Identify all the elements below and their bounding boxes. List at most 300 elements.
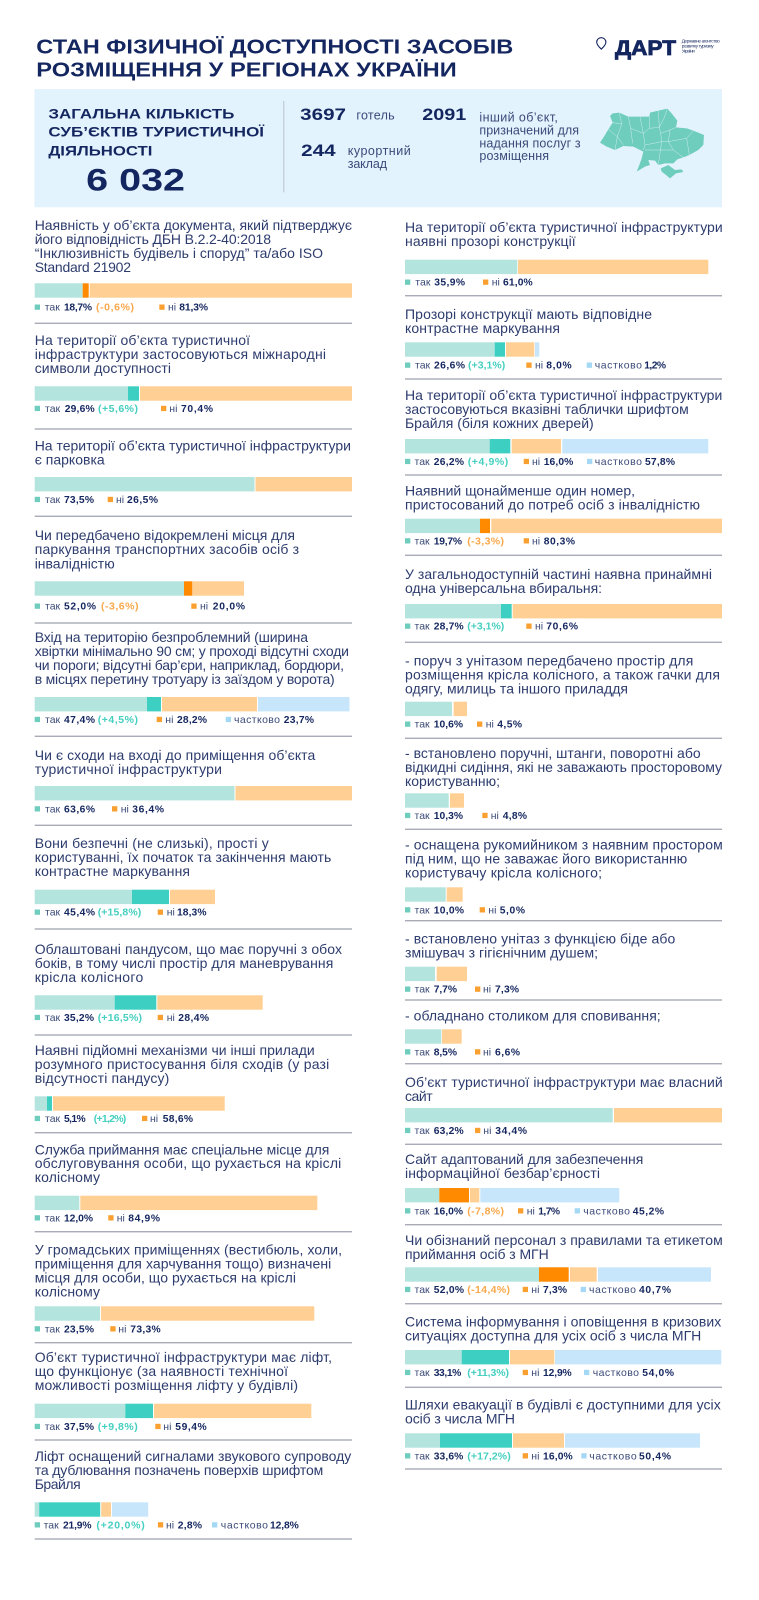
stacked bar	[35, 1196, 317, 1210]
legend: ні	[531, 1450, 539, 1462]
legend	[35, 1519, 299, 1531]
legend: так	[414, 535, 430, 547]
stacked bar	[405, 887, 463, 902]
heading: total count: ДІЯЛЬНОСТІ	[48, 142, 152, 158]
stacked bar	[35, 1096, 225, 1111]
stacked bar	[405, 1350, 721, 1364]
question text	[35, 1142, 341, 1185]
legend: 57,8%	[645, 457, 675, 468]
panel: reserved parking	[35, 527, 352, 624]
legend: (+1,2%)	[94, 1113, 126, 1125]
question text	[35, 1042, 329, 1086]
stacked bar	[35, 1502, 148, 1517]
panel: changing table	[405, 1008, 722, 1064]
question text: контрастне маркування	[35, 863, 190, 879]
question text: туристичної інфраструктури	[35, 761, 222, 777]
legend	[35, 1113, 193, 1125]
question text: хвіртки мінімально 90 см; у проході відсутні сходи	[35, 643, 349, 659]
legend: так	[45, 1113, 61, 1125]
question text: - обладнано столиком для сповивання;	[405, 1008, 661, 1024]
legend: 7,3%	[543, 1285, 567, 1296]
legend: 61,0%	[503, 278, 533, 289]
question text: боків, в тому числі простір для маневрування	[35, 955, 333, 971]
legend: частково	[595, 360, 642, 372]
question text: Наявні підйомні механізми чи інші прилади	[35, 1042, 315, 1058]
question text: користуванню;	[405, 773, 500, 789]
question text: місця для особи, що рухається на кріслі	[35, 1270, 296, 1286]
legend: 73,5%	[64, 495, 94, 506]
legend: 52,0%	[64, 602, 96, 613]
panel: adapted website	[405, 1151, 722, 1225]
stat: hotels: 3697	[300, 105, 346, 124]
question text	[405, 930, 676, 960]
question text: можливості розміщення ліфту у будівлі)	[35, 1377, 298, 1393]
stat: other: розміщення	[479, 149, 549, 163]
legend: 12,9%	[543, 1368, 572, 1379]
legend: так	[414, 1125, 430, 1137]
panel: washbasin	[405, 836, 723, 921]
stat: resorts: заклад	[348, 157, 388, 171]
legend: так	[45, 403, 61, 415]
legend: ні	[531, 1284, 539, 1296]
legend: (+3,1%)	[468, 360, 505, 372]
stacked bar	[405, 604, 722, 618]
legend: так	[45, 302, 60, 314]
legend: 6,6%	[495, 1047, 520, 1058]
question text: осіб з числа МГН	[405, 1410, 515, 1426]
question text	[35, 527, 299, 572]
question text: - поруч з унітазом передбачено простір для	[405, 652, 693, 668]
legend: (-7,8%)	[467, 1205, 504, 1217]
stat: hotels	[300, 105, 395, 124]
legend: так	[414, 1284, 430, 1296]
legend: 73,3%	[130, 1324, 161, 1335]
legend: (+15,8%)	[98, 907, 141, 919]
question text: Облаштовані пандусом, що має поручні з обох	[35, 941, 342, 957]
legend	[35, 907, 207, 919]
legend: ні	[150, 1113, 158, 1125]
legend	[35, 1323, 161, 1335]
stacked bar	[405, 519, 722, 533]
question text	[405, 1074, 723, 1104]
legend: 33,6%	[434, 1451, 463, 1462]
question text	[35, 747, 316, 777]
stat: resorts	[301, 141, 411, 171]
question text: змішувач з гігієнічним душем;	[405, 944, 598, 960]
question text	[35, 941, 342, 985]
question text: крісла колісного	[35, 969, 144, 985]
legend: 54,0%	[642, 1368, 674, 1379]
legend	[35, 601, 245, 613]
panel: reception desk	[35, 1142, 352, 1232]
panel: document compliance	[35, 217, 352, 324]
panel: contrast marking	[405, 306, 722, 380]
legend: частково	[589, 1284, 636, 1296]
legend: так	[415, 277, 431, 289]
stacked bar	[35, 697, 349, 711]
question text	[35, 217, 352, 275]
question text: під ним, що не заважає його використанню	[405, 850, 687, 866]
legend: 45,2%	[633, 1206, 664, 1217]
stacked bar	[35, 786, 352, 800]
panel: accessibility symbols	[35, 332, 352, 430]
legend: так	[414, 904, 430, 916]
legend	[35, 1012, 209, 1024]
icon: map of Ukraine	[600, 109, 704, 178]
legend: 52,0%	[434, 1285, 464, 1296]
legend: (+9,8%)	[98, 1421, 138, 1433]
legend: ні	[166, 1519, 174, 1531]
panel: crisis notification	[405, 1314, 722, 1388]
question text	[405, 1151, 643, 1181]
legend: 7,7%	[434, 985, 457, 996]
question text	[405, 1314, 721, 1344]
panel: wheelchair space near toilet	[405, 652, 722, 739]
logo: ДАРТ: України	[682, 48, 695, 54]
legend: так	[45, 1212, 60, 1224]
question text: обслуговування особи, що рухається на кріслі	[35, 1155, 341, 1171]
legend: 1,7%	[538, 1206, 560, 1217]
legend: 47,4%	[64, 715, 95, 726]
legend: так	[45, 1323, 60, 1335]
question text: Сайт адаптований для забезпечення	[405, 1151, 643, 1167]
stacked bar	[35, 995, 263, 1010]
question text: На території об’єкта туристичної інфраструктури	[35, 438, 351, 454]
panel: evacuation routes	[405, 1396, 722, 1470]
legend	[405, 904, 525, 916]
legend: 45,4%	[64, 908, 95, 919]
legend	[405, 1046, 520, 1058]
legend: 35,9%	[434, 278, 465, 289]
legend: (-0,6%)	[96, 302, 134, 314]
legend: 29,6%	[65, 404, 95, 415]
legend: 70,4%	[181, 404, 213, 415]
question text	[35, 1349, 332, 1393]
logo: ДАРТ	[597, 37, 720, 60]
legend: так	[414, 1367, 430, 1379]
question text	[405, 1232, 723, 1262]
legend: частково	[589, 1450, 637, 1462]
legend: 80,3%	[544, 536, 575, 547]
legend: 16,0%	[543, 1451, 573, 1462]
question text: У громадських приміщеннях (вестибюль, холи,	[35, 1242, 342, 1258]
legend: ні	[531, 1367, 539, 1379]
legend	[35, 1421, 207, 1433]
title: СТАН ФІЗИЧНОЇ ДОСТУПНОСТІ ЗАСОБІВ	[36, 35, 513, 58]
question text: Чи передбачено відокремлені місця для	[35, 527, 295, 543]
question text: На території об’єкта туристичної	[35, 332, 250, 348]
legend: ні	[492, 277, 500, 289]
question text: та дублювання позначень поверхів шрифтом	[35, 1462, 323, 1478]
legend: 35,2%	[64, 1013, 94, 1024]
legend: так	[414, 456, 430, 468]
legend: частково	[234, 714, 280, 726]
legend: 28,4%	[178, 1013, 209, 1024]
panel: safe stairs	[35, 835, 352, 930]
stacked bar	[35, 283, 352, 298]
stacked bar	[405, 1433, 700, 1448]
heading: total count	[48, 105, 265, 198]
legend: ні	[116, 494, 124, 506]
question text: - встановлено поручні, штанги, поворотні або	[405, 745, 701, 761]
legend: 7,3%	[495, 985, 519, 996]
legend: ні	[163, 1421, 171, 1433]
legend: частково	[595, 456, 642, 468]
stacked bar	[35, 1404, 311, 1418]
panel: own website	[405, 1074, 723, 1145]
legend: 10,6%	[434, 720, 463, 731]
stat: other	[422, 105, 581, 163]
panel: entrance to territory	[35, 629, 352, 737]
question text: пристосований до потреб осіб з інвалідністю	[405, 496, 700, 512]
legend: 50,4%	[639, 1451, 671, 1462]
question text: - оснащена рукомийником з наявним простором	[405, 836, 723, 852]
question text: Брайля	[35, 1476, 81, 1492]
legend: 18,7%	[64, 303, 92, 314]
question text: що функціонує (за наявності технічної	[35, 1363, 288, 1379]
legend	[405, 984, 519, 996]
legend: 19,7%	[434, 536, 462, 547]
legend	[35, 714, 314, 726]
legend: 70,6%	[546, 622, 578, 633]
legend: ні	[527, 1205, 535, 1217]
legend: 4,5%	[497, 720, 522, 731]
stat: other: 2091	[422, 105, 466, 124]
question text: одягу, милиць та іншого приладдя	[405, 680, 628, 696]
legend: 84,9%	[128, 1213, 160, 1224]
stacked bar	[405, 342, 539, 357]
panel: summary	[34, 89, 722, 207]
legend: так	[45, 907, 61, 919]
legend: (+5,6%)	[98, 403, 138, 415]
question text: відсутності пандусу)	[35, 1070, 169, 1086]
question text: інфраструктури застосовуються міжнародні	[35, 346, 326, 362]
legend: ні	[486, 719, 494, 731]
legend: так	[45, 803, 61, 815]
question text: в місцях перетину тротуару із заїздом у ворота)	[35, 671, 335, 687]
stacked bar	[405, 967, 467, 981]
legend: так	[414, 810, 430, 822]
legend: так	[414, 621, 430, 633]
stacked bar	[405, 1188, 619, 1202]
question text: Ліфт оснащений сигналами звукового супроводу	[35, 1448, 351, 1464]
legend	[405, 719, 522, 731]
question text: приміщення для харчування тощо) визначені	[35, 1256, 331, 1272]
legend: 26,6%	[434, 361, 465, 372]
logo: ДАРТ: ДАРТ	[615, 37, 676, 60]
stacked bar	[405, 1267, 711, 1282]
question text: Наявний щонайменше один номер,	[405, 482, 635, 498]
question text: Брайля (біля кожних дверей)	[405, 415, 594, 431]
question text: ситуаціях доступна для усіх осіб з числа МГН	[405, 1328, 701, 1344]
question text	[35, 1242, 342, 1300]
question text	[35, 629, 349, 687]
stacked bar	[405, 1029, 462, 1044]
legend: 58,6%	[163, 1114, 193, 1125]
panel: universal restroom	[405, 566, 722, 643]
question text: Система інформування і оповіщення в кризових	[405, 1314, 721, 1330]
legend: частково	[221, 1519, 268, 1531]
heading: total count: ЗАГАЛЬНА КІЛЬКІСТЬ	[48, 105, 234, 121]
legend: 36,4%	[132, 804, 164, 815]
legend	[405, 1205, 664, 1217]
question text: приймання осіб з МГН	[405, 1246, 549, 1262]
legend: ні	[117, 1212, 125, 1224]
legend: 37,5%	[64, 1422, 94, 1433]
question text: Вхід на територію безпроблемний (ширина	[35, 629, 308, 645]
question text: Служба приймання має спеціальне місце для	[35, 1142, 329, 1158]
question text	[405, 387, 722, 431]
legend	[405, 1125, 527, 1137]
legend	[35, 403, 213, 415]
question text: На території об’єкта туристичної інфраструктури	[405, 387, 722, 403]
legend: ні	[532, 456, 540, 468]
heading: total count: СУБ’ЄКТІВ ТУРИСТИЧНОЇ	[48, 124, 265, 140]
legend: так	[44, 1519, 59, 1531]
question text: - встановлено унітаз з функцією біде або	[405, 930, 676, 946]
legend: ні	[121, 803, 129, 815]
panel: ramps	[35, 941, 352, 1036]
legend: 16,0%	[544, 457, 573, 468]
legend: ні	[535, 621, 543, 633]
legend: (-14,4%)	[467, 1284, 510, 1296]
stacked bar	[405, 702, 467, 716]
legend: 18,3%	[177, 908, 206, 919]
legend	[405, 810, 527, 822]
stacked bar	[35, 1306, 314, 1321]
question text	[405, 482, 700, 512]
legend: ні	[483, 984, 491, 996]
question text: є парковка	[35, 452, 105, 468]
panel: adapted rooms	[405, 482, 722, 556]
legend: 5,1%	[64, 1114, 86, 1125]
legend: 59,4%	[175, 1422, 207, 1433]
heading: total count: 6 032	[86, 162, 185, 198]
question text	[405, 566, 712, 596]
question text: одна універсальна вбиральня:	[405, 580, 602, 596]
legend: так	[45, 494, 61, 506]
legend	[35, 803, 164, 815]
question text: чи пороги; відсутні бар’єри, наприклад, бордюри,	[35, 657, 344, 673]
legend: 2,8%	[178, 1520, 202, 1531]
legend: ні	[483, 1125, 491, 1137]
legend: (+4,5%)	[98, 714, 138, 726]
question text	[35, 438, 351, 468]
legend: так	[414, 984, 430, 996]
legend: 8,0%	[546, 361, 572, 372]
question text: користуванні, їх початок та закінчення мають	[35, 849, 331, 865]
legend: (+20,0%)	[96, 1519, 145, 1531]
legend: 28,2%	[177, 715, 207, 726]
panel: elevator signals	[35, 1448, 352, 1540]
legend: 21,9%	[63, 1520, 92, 1531]
question text: Шляхи евакуації в будівлі є доступними для усіх	[405, 1396, 721, 1412]
legend: 5,0%	[500, 905, 525, 916]
legend: 26,2%	[434, 457, 464, 468]
question text: сайт	[405, 1088, 433, 1104]
legend	[405, 535, 575, 547]
legend: 16,0%	[434, 1206, 463, 1217]
panel: transparent structures	[405, 219, 723, 296]
legend: частково	[583, 1205, 630, 1217]
stat: resorts: курортний	[348, 144, 411, 158]
legend: ні	[200, 601, 208, 613]
legend: 28,7%	[434, 622, 464, 633]
legend: 4,8%	[503, 811, 527, 822]
question text: розміщення крісла колісного, а також гачки для	[405, 666, 720, 682]
legend	[405, 360, 666, 372]
panel: elevator	[35, 1349, 352, 1441]
legend	[405, 1450, 671, 1462]
question text: символи доступності	[35, 360, 171, 376]
stat: resorts: 244	[301, 141, 336, 160]
title: РОЗМІЩЕННЯ У РЕГІОНАХ УКРАЇНИ	[36, 59, 457, 82]
legend: 63,6%	[64, 804, 95, 815]
stat: other: інший об’єкт,	[479, 110, 558, 124]
legend: (+11,3%)	[467, 1367, 509, 1379]
stacked bar	[35, 890, 215, 904]
legend	[35, 494, 158, 506]
legend: ні	[483, 1046, 491, 1058]
legend: так	[45, 601, 61, 613]
question text: Об’єкт туристичної інфраструктури має ліфт,	[35, 1349, 332, 1365]
question text: Наявність у об’єкта документа, який підтверджує	[35, 217, 352, 233]
panel: handrails	[405, 745, 722, 830]
panel: braille plates	[405, 387, 722, 476]
question text: відкидні сидіння, які не заважають просторовому	[405, 759, 722, 775]
question text: колісному	[35, 1284, 100, 1300]
legend	[35, 302, 208, 314]
question text	[405, 219, 723, 249]
question text: Прозорі конструкції мають відповідне	[405, 306, 652, 322]
question text: Об’єкт туристичної інфраструктури має власний	[405, 1074, 723, 1090]
legend: ні	[167, 907, 175, 919]
legend	[405, 1367, 674, 1379]
legend: так	[414, 719, 430, 731]
stacked bar	[405, 793, 464, 808]
question text	[405, 836, 723, 880]
question text: У загальнодоступній частині наявна принаймні	[405, 566, 712, 582]
question text	[405, 306, 652, 336]
question text: На території об’єкта туристичної інфраструктури	[405, 219, 723, 235]
legend: (-3,6%)	[101, 601, 138, 613]
question text: його відповідність ДБН В.2.2-40:2018	[35, 231, 271, 247]
question text: користувачу крісла колісного;	[405, 864, 602, 880]
legend: 34,4%	[495, 1126, 527, 1137]
legend: 10,0%	[434, 905, 464, 916]
legend: 10,3%	[434, 811, 463, 822]
legend	[405, 277, 533, 289]
legend: частково	[593, 1367, 639, 1379]
icon: location pin	[597, 38, 606, 49]
question text: колісному	[35, 1169, 100, 1185]
stacked bar	[35, 386, 352, 401]
legend: (+17,2%)	[467, 1450, 511, 1462]
stacked bar	[405, 439, 708, 453]
logo: ДАРТ: розвитку туризму	[682, 44, 714, 48]
legend: так	[414, 1450, 430, 1462]
legend: так	[414, 1205, 430, 1217]
legend: 23,5%	[64, 1324, 94, 1335]
logo: ДАРТ: Державне агентство	[682, 38, 720, 44]
legend: ні	[488, 904, 496, 916]
legend: ні	[532, 535, 540, 547]
question text: контрастне маркування	[405, 320, 560, 336]
legend: так	[415, 360, 431, 372]
legend	[405, 1284, 671, 1296]
legend: ні	[169, 403, 177, 415]
panel: staff awareness	[405, 1232, 723, 1304]
